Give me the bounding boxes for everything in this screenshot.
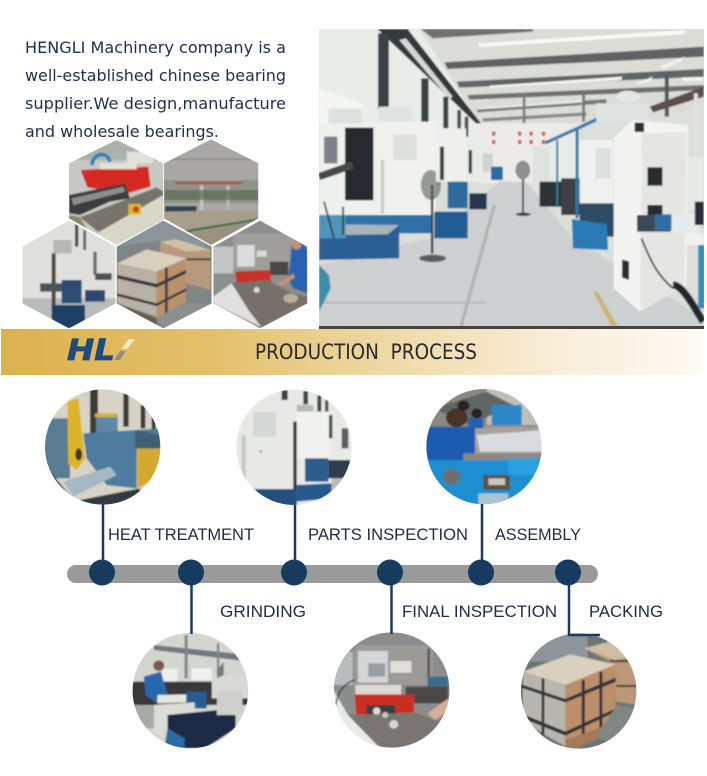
photo circle: parts inspection	[233, 388, 355, 508]
logo: HL	[67, 333, 135, 367]
timeline nodes	[89, 560, 581, 586]
intro text block: and wholesale bearings.	[25, 122, 219, 141]
hexagon photo collage	[20, 138, 308, 330]
hexagon: packed boxes	[115, 219, 213, 329]
timeline	[67, 504, 600, 635]
center fan	[515, 161, 530, 216]
photo circle: final inspection	[332, 632, 452, 750]
white cabinet	[614, 93, 705, 322]
hexagon: red machine	[67, 138, 165, 247]
banner: production process	[1, 329, 701, 375]
logo: HL: HL	[67, 333, 115, 367]
right machines	[533, 87, 704, 250]
step labels: GRINDING	[220, 602, 306, 621]
step labels: HEAT TREATMENT	[108, 525, 254, 544]
step labels: ASSEMBLY	[495, 525, 581, 544]
photo circle: grinding	[130, 632, 251, 752]
hall shell: walls, ceiling and floor	[319, 29, 704, 327]
photo circle: assembly	[425, 388, 543, 505]
intro text block: HENGLI Machinery company is a	[25, 38, 286, 57]
step labels: FINAL INSPECTION	[402, 602, 557, 621]
timeline bar	[67, 565, 598, 583]
step labels: PARTS INSPECTION	[308, 525, 468, 544]
intro text block: supplier.We design,manufacture	[25, 94, 286, 113]
hexagon: factory exterior	[163, 138, 260, 247]
connector lines	[103, 504, 600, 635]
factory floor photo	[317, 28, 705, 329]
step labels: PACKING	[589, 602, 663, 621]
banner heading: PRODUCTION PROCESS	[255, 340, 477, 364]
photo circle: heat treatment	[43, 388, 163, 505]
left machines	[319, 88, 503, 312]
step labels	[108, 525, 663, 621]
intro text block	[25, 38, 286, 141]
hexagon: machine hall	[20, 219, 117, 330]
hexagon: inspection worker	[212, 219, 308, 329]
intro text block: well-established chinese bearing	[25, 66, 286, 85]
photo circle: packing	[520, 632, 638, 752]
